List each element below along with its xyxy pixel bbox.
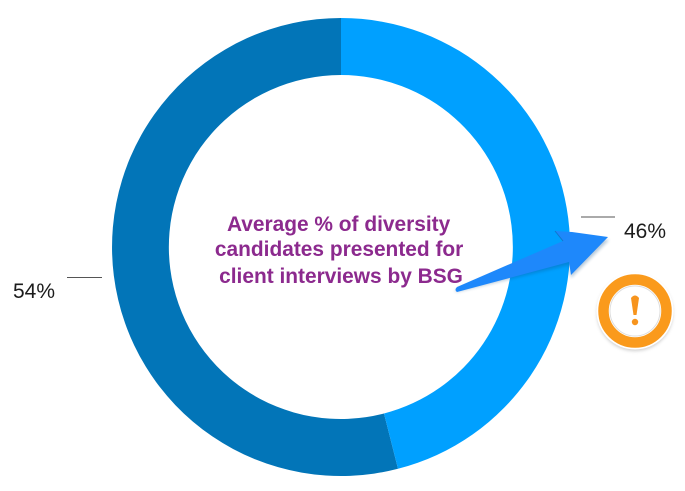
segment: 46% (341, 18, 570, 469)
segment: 54% (112, 18, 398, 476)
center text: candidates presented for (215, 238, 463, 261)
icon: exclamation mark (631, 296, 639, 325)
label: 46%: 46% (624, 220, 666, 243)
center text: Average % of diversity (227, 213, 451, 236)
label: 54%: 54% (13, 280, 55, 303)
arrow (455, 231, 609, 292)
label: 46% (581, 217, 666, 243)
center text: client interviews by BSG (219, 265, 463, 288)
label: 54% (13, 278, 102, 303)
donut chart (112, 18, 570, 476)
icon: warning badge (596, 272, 674, 351)
